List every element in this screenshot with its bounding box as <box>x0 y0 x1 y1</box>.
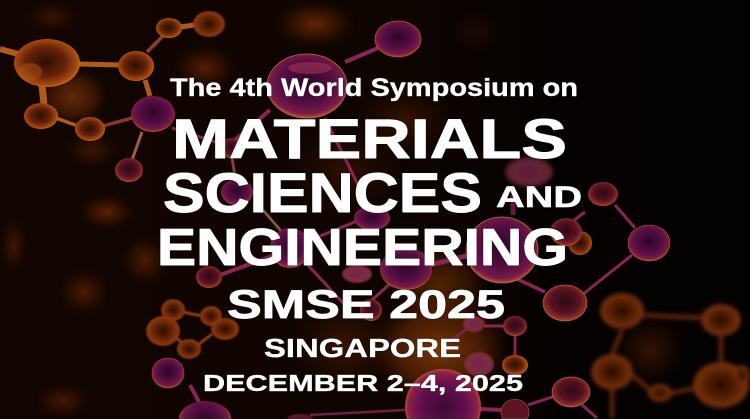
molecule: orange upper left <box>0 11 225 182</box>
heading: SMSE 2025: SMSE 2025 <box>227 283 505 327</box>
text: symposium line: The 4th World Symposium on <box>170 74 578 102</box>
molecule: blurred right background <box>591 293 750 418</box>
heading: MATERIALS: MATERIALS <box>172 107 567 170</box>
heading: SCIENCES AND: AND <box>496 181 582 214</box>
heading: ENGINEERING: ENGINEERING <box>157 219 568 277</box>
heading: SCIENCES AND <box>163 161 582 224</box>
text: dates: DECEMBER 2–4, 2025 <box>203 370 523 396</box>
title block <box>157 74 582 396</box>
molecule: central purple network <box>152 21 670 419</box>
sphere: large purple top <box>267 54 347 118</box>
molecule: blurred left background <box>146 299 239 359</box>
text: location: SINGAPORE <box>264 333 461 363</box>
heading: SCIENCES AND: SCIENCES <box>163 161 482 224</box>
